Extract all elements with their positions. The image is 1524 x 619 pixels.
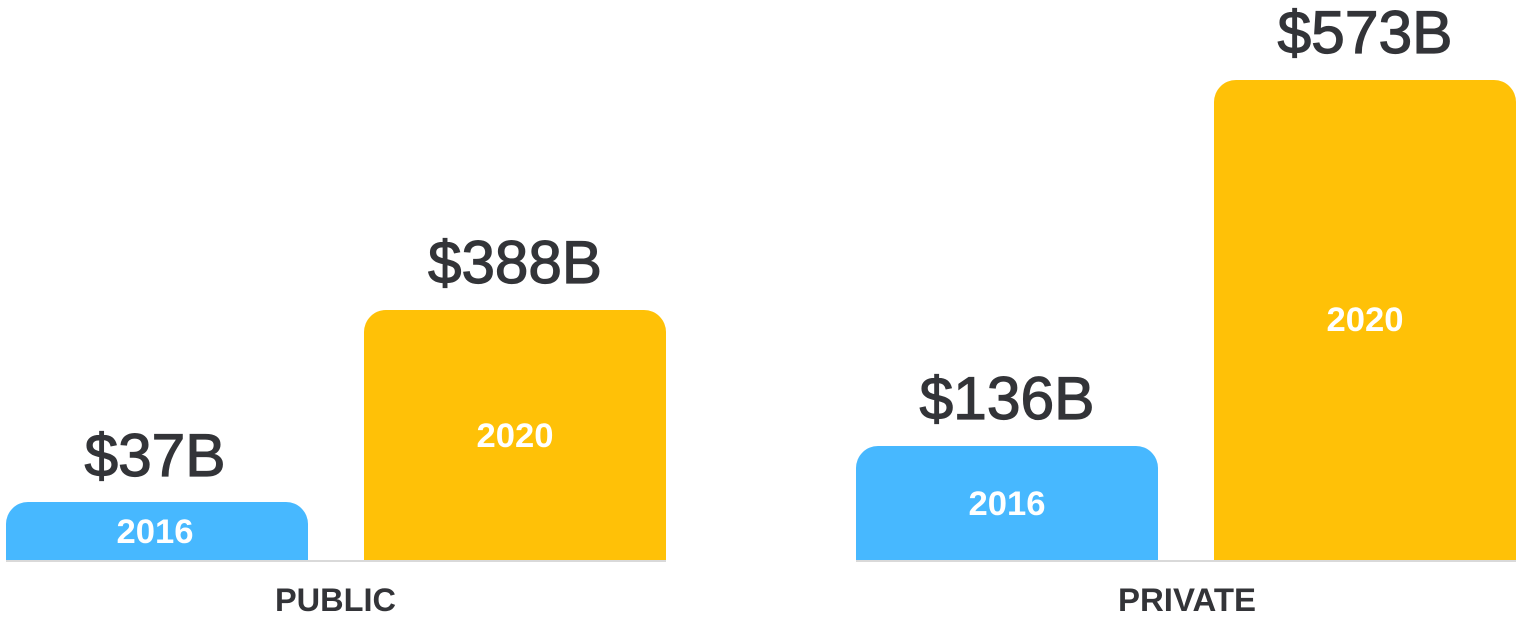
value: public 2020: $388B [428,229,602,296]
group: public [6,229,666,618]
category label: public: PUBLIC [275,582,396,618]
bar: private 2020 [1214,80,1516,560]
bar: public 2016 [6,502,308,560]
value: private 2020: $573B [1278,0,1452,66]
category label: private: PRIVATE [1118,582,1256,618]
bar: private 2016 [856,446,1158,560]
year label: public 2020: 2020 [476,417,554,455]
year label: public 2016: 2016 [116,513,194,551]
group: private [856,0,1516,618]
bar: public 2020 [364,310,666,560]
year label: private 2020: 2020 [1326,301,1404,339]
year label: private 2016: 2016 [968,485,1046,523]
value: public 2016: $37B [84,422,226,489]
value: private 2016: $136B [920,365,1094,432]
